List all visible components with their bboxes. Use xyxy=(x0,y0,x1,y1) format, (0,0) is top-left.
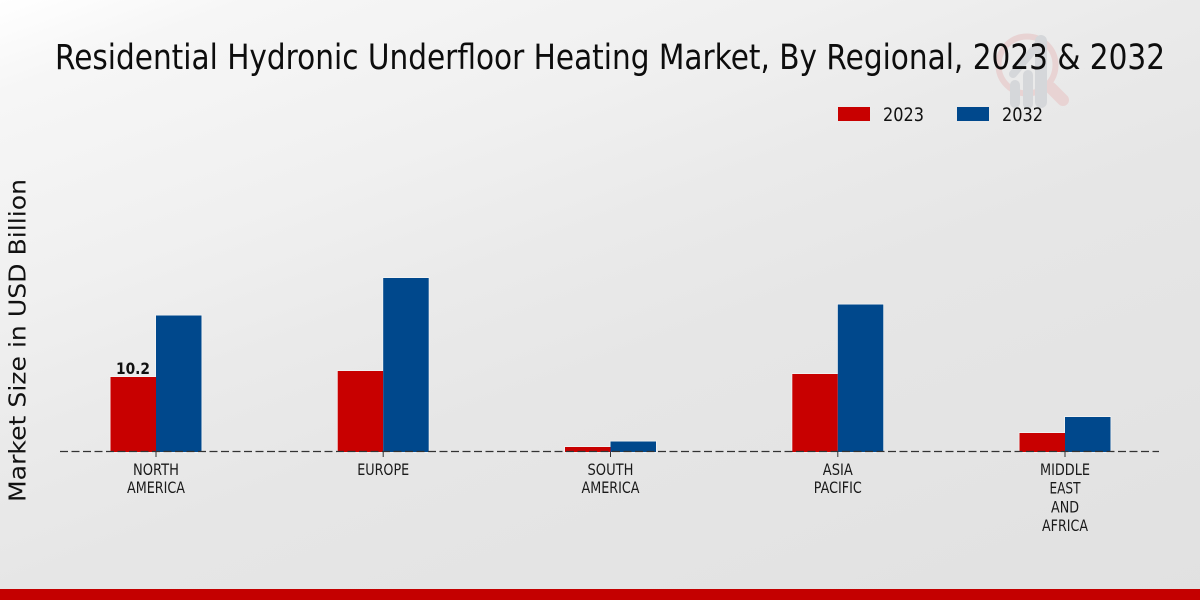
bars: Asia Pacific xyxy=(792,304,883,452)
icon: watermark magnifier logo xyxy=(998,36,1063,104)
legend swatch: 2032 xyxy=(957,107,989,121)
label: South America: AMERICA xyxy=(582,478,640,497)
label: Asia Pacific: ASIA xyxy=(823,460,853,479)
x axis labels xyxy=(127,460,1090,535)
label: North America: AMERICA xyxy=(127,478,185,497)
bars: North America xyxy=(110,316,202,452)
y axis label: Market Size in USD Billion xyxy=(6,179,32,502)
bars: Europe xyxy=(338,278,429,452)
x axis baseline xyxy=(60,450,1159,452)
legend swatch: 2023 xyxy=(838,107,870,121)
legend label: 2032: 2032 xyxy=(1002,104,1043,126)
label: Middle East and Africa: MIDDLE xyxy=(1040,460,1090,479)
value label: 10.2: 10.2 xyxy=(116,359,150,378)
label: North America xyxy=(127,460,185,497)
label: Europe: EUROPE xyxy=(357,460,409,479)
label: South America xyxy=(582,460,640,497)
legend xyxy=(838,104,1043,126)
label: North America: NORTH xyxy=(133,460,179,479)
label: Middle East and Africa: AND xyxy=(1051,498,1079,516)
label: Asia Pacific xyxy=(814,460,862,497)
label: Middle East and Africa: EAST xyxy=(1050,478,1081,498)
bars: Middle East and Africa xyxy=(1020,417,1110,452)
bar chart xyxy=(60,278,1159,457)
legend label: 2023: 2023 xyxy=(883,104,924,126)
label: Asia Pacific: PACIFIC xyxy=(814,478,862,497)
label: South America: SOUTH xyxy=(588,460,634,479)
footer bar xyxy=(0,589,1200,600)
bars: South America xyxy=(565,442,656,452)
label: Middle East and Africa: AFRICA xyxy=(1042,516,1088,535)
label: Middle East and Africa xyxy=(1040,460,1090,535)
